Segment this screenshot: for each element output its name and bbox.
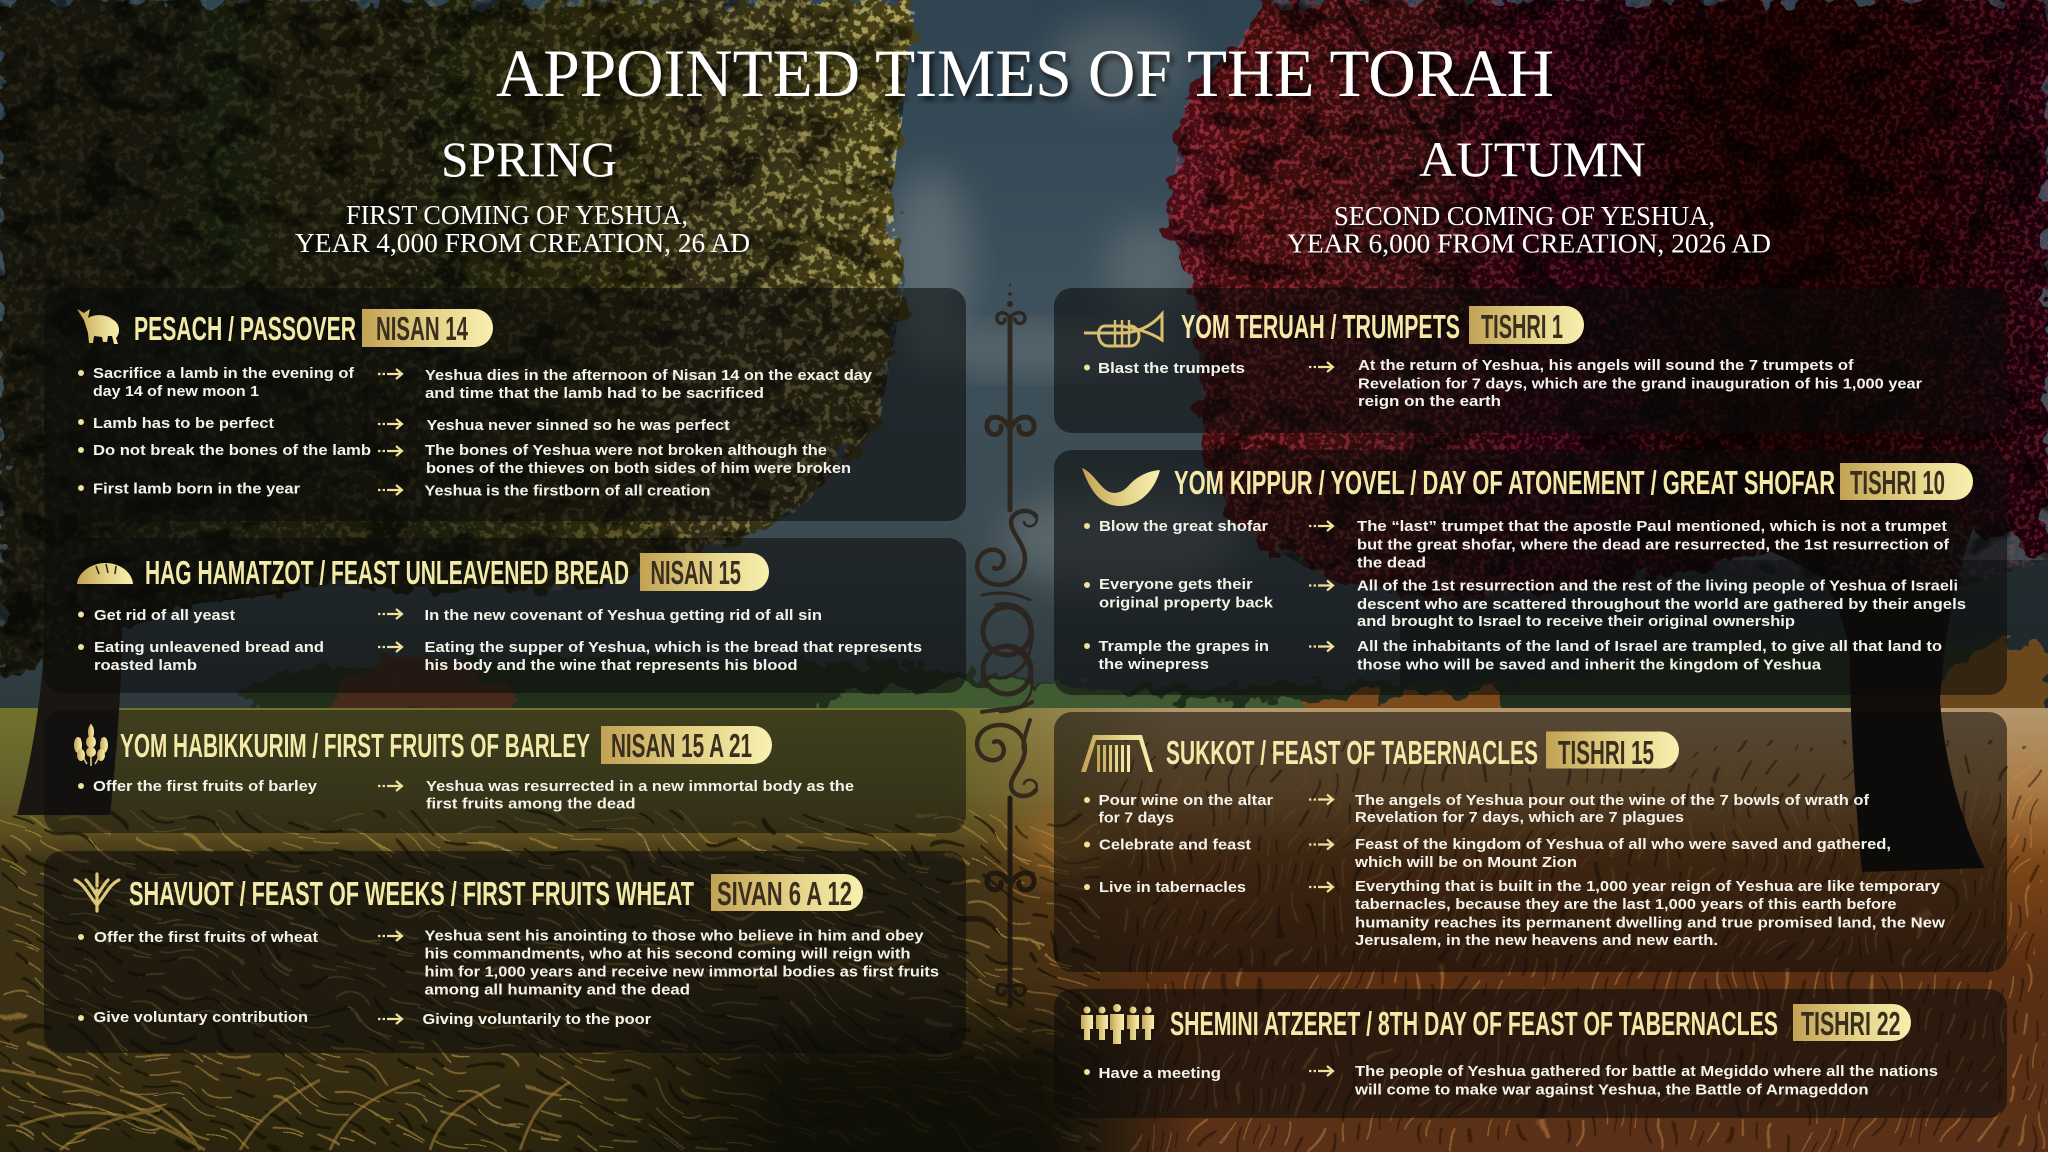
right tree canopy: [1168, 0, 2048, 600]
panel: Sukkot: [1054, 712, 2007, 972]
heading: autumn column: AUTUMN: [1419, 131, 1646, 187]
heading: autumn column: [1287, 131, 1771, 258]
row: sacrifice a lamb: day 14 of new moon 1: [93, 383, 259, 400]
row: sacrifice a lamb: and time that the lamb had to be sacrificed: [425, 385, 764, 402]
row: barley: Yeshua was resurrected in a new immortal body as the: [426, 778, 854, 795]
row: tabernacles: tabernacles, because they are the last 1,000 years of this earth before: [1355, 896, 1896, 913]
heading: Sukkot: SUKKOT / FEAST OF TABERNACLES: [1166, 734, 1538, 771]
row: trample grapes: Trample the grapes in: [1098, 638, 1269, 655]
row: yeast: In the new covenant of Yeshua getting rid of all sin: [424, 607, 822, 624]
row: meeting: will come to make war against Yeshua, the Battle of Armageddon: [1354, 1082, 1868, 1098]
heading: autumn column: SECOND COMING OF YESHUA,: [1334, 201, 1715, 231]
panel: Yom Teruah: [1054, 288, 2007, 433]
row: bones: Do not break the bones of the lamb: [93, 442, 371, 459]
icon: sheep: [77, 309, 119, 344]
date pill: Tishri 10: TISHRI 10: [1850, 464, 1945, 501]
row: unleavened bread: his body and the wine that represents his blood: [424, 657, 798, 674]
row: meeting: [1084, 1063, 1938, 1098]
row: unleavened bread: roasted lamb: [94, 657, 197, 674]
row: tabernacles: Jerusalem, in the new heavens and new earth.: [1355, 932, 1718, 949]
icon: bread: [77, 563, 133, 584]
row: first lamb: [78, 480, 710, 500]
row: great shofar: The “last” trumpet that the apostle Paul mentioned, which is not a trumpet: [1357, 518, 1947, 535]
row: tabernacles: Live in tabernacles: [1099, 879, 1246, 896]
row: great shofar: but the great shofar, where the dead are resurrected, the 1st resurrection of: [1357, 536, 1950, 554]
row: yeast: Get rid of all yeast: [94, 607, 235, 624]
row: trumpets: At the return of Yeshua, his angels will sound the 7 trumpets of: [1358, 357, 1855, 374]
row: unleavened bread: [78, 639, 922, 674]
row: trample grapes: those who will be saved and inherit the kingdom of Yeshua: [1357, 656, 1822, 674]
heading: spring column: YEAR 4,000 FROM CREATION, 26 AD: [295, 228, 750, 258]
row: great shofar: the dead: [1357, 554, 1426, 572]
date pill: Tishri 22: [1793, 1004, 1911, 1042]
date pill: Nisan 15: NISAN 15: [650, 554, 741, 591]
date pill: Nisan 14: NISAN 14: [376, 310, 468, 347]
panel: Yom HaBikkurim: [44, 710, 966, 833]
row: trumpets: [1084, 357, 1922, 410]
row: barley: [78, 778, 854, 812]
row: trample grapes: the winepress: [1098, 656, 1209, 673]
date pill: Tishri 22: TISHRI 22: [1801, 1005, 1900, 1042]
panel: Hag HaMatzot: [44, 538, 966, 693]
row: great shofar: Blow the great shofar: [1099, 518, 1268, 535]
row: lamb perfect: [78, 415, 730, 434]
distant treeline: [250, 640, 2048, 725]
row: tabernacles: Everything that is built in the 1,000 year reign of Yeshua are like temporary: [1355, 878, 1941, 895]
row: wheat: [78, 928, 939, 998]
fields: [0, 708, 2048, 1152]
icon: trumpet: [1084, 314, 1162, 346]
row: pour wine: Pour wine on the altar: [1098, 792, 1273, 809]
icon: people group: [1081, 1004, 1154, 1044]
row: trample grapes: All the inhabitants of the land of Israel are trampled, to give all that land to: [1357, 638, 1942, 655]
row: original property: Everyone gets their: [1099, 576, 1253, 593]
heading: Hag HaMatzot: HAG HAMATZOT / FEAST UNLEAVENED BREAD: [145, 554, 629, 591]
row: wheat: Offer the first fruits of wheat: [94, 929, 318, 946]
row: sacrifice a lamb: [78, 365, 873, 402]
row: pour wine: Revelation for 7 days, which are 7 plagues: [1355, 809, 1684, 826]
row: celebrate: Feast of the kingdom of Yeshua of all who were saved and gathered,: [1355, 836, 1891, 853]
row: voluntary contribution: Give voluntary contribution: [94, 1009, 308, 1026]
date pill: Nisan 15 a 21: NISAN 15 A 21: [611, 727, 752, 764]
central ornament divider: [977, 284, 1037, 1006]
row: trumpets: reign on the earth: [1358, 393, 1501, 410]
panel: Pesach / Passover: [44, 288, 966, 521]
row: original property: and brought to Israel to receive their original ownership: [1357, 613, 1795, 630]
heading: autumn column: YEAR 6,000 FROM CREATION, 2026 AD: [1287, 228, 1771, 258]
row: pour wine: for 7 days: [1098, 810, 1174, 826]
heading: Yom Teruah: YOM TERUAH / TRUMPETS: [1181, 308, 1460, 345]
left tree trunk and branches: [17, 580, 122, 815]
row: trumpets: Blast the trumpets: [1098, 360, 1245, 377]
date pill: Tishri 15: TISHRI 15: [1558, 734, 1654, 771]
date pill: Tishri 15: [1546, 732, 1679, 771]
row: original property: [1084, 576, 1966, 630]
panel: Shemini Atzeret: [1054, 989, 2007, 1118]
row: bones: The bones of Yeshua were not broken although the: [425, 442, 827, 459]
row: lamb perfect: Yeshua never sinned so he was perfect: [426, 417, 730, 434]
date pill: Sivan 6 a 12: [711, 874, 863, 912]
row: trumpets: Revelation for 7 days, which are the grand inauguration of his 1,000 year: [1358, 375, 1922, 392]
row: first lamb: Yeshua is the firstborn of all creation: [424, 482, 710, 500]
row: celebrate: [1084, 836, 1891, 871]
row: tabernacles: [1084, 878, 1945, 949]
heading: Pesach: PESACH / PASSOVER: [134, 310, 356, 347]
row: original property: original property back: [1099, 594, 1274, 612]
left tree canopy: [0, 0, 916, 680]
date pill: Tishri 1: [1469, 306, 1584, 345]
heading: Shavuot: SHAVUOT / FEAST OF WEEKS / FIRST FRUITS WHEAT: [129, 875, 694, 912]
row: barley: Offer the first fruits of barley: [93, 778, 318, 795]
heading: spring column: SPRING: [441, 131, 617, 187]
row: bones: [78, 442, 851, 477]
main title: APPOINTED TIMES OF THE TORAH: [496, 35, 1554, 111]
icon: shofar: [1082, 468, 1160, 506]
row: voluntary contribution: [78, 1009, 651, 1028]
row: wheat: among all humanity and the dead: [424, 982, 690, 998]
row: wheat: Yeshua sent his anointing to those who believe in him and obey: [424, 928, 924, 944]
date pill: Tishri 1: TISHRI 1: [1481, 308, 1563, 345]
heading: spring column: FIRST COMING OF YESHUA,: [346, 200, 688, 230]
row: wheat: him for 1,000 years and receive new immortal bodies as first fruits: [424, 964, 939, 980]
heading: spring column: [295, 131, 750, 258]
row: original property: All of the 1st resurrection and the rest of the living people of Yeshua of Israeli: [1357, 578, 1958, 594]
icon: tabernacle: [1081, 735, 1153, 772]
row: unleavened bread: Eating the supper of Yeshua, which is the bread that represents: [424, 639, 922, 656]
row: bones: bones of the thieves on both sides of him were broken: [426, 460, 851, 477]
heading: Yom HaBikkurim: YOM HABIKKURIM / FIRST FRUITS OF BARLEY: [120, 727, 590, 764]
icon: barley: [74, 724, 108, 766]
row: yeast: [78, 607, 822, 624]
date pill: Sivan 6 a 12: SIVAN 6 A 12: [717, 875, 852, 912]
row: celebrate: which will be on Mount Zion: [1354, 854, 1577, 871]
row: trample grapes: [1084, 638, 1942, 674]
row: pour wine: The angels of Yeshua pour out the wine of the 7 bowls of wrath of: [1355, 792, 1870, 809]
row: lamb perfect: Lamb has to be perfect: [93, 415, 274, 432]
row: voluntary contribution: Giving voluntarily to the poor: [422, 1011, 651, 1028]
row: celebrate: Celebrate and feast: [1099, 836, 1251, 854]
right tree trunk and branches: [1760, 510, 1985, 872]
date pill: Nisan 15 a 21: [601, 726, 772, 764]
panel: Yom Kippur: [1054, 450, 2007, 695]
row: pour wine: [1084, 792, 1870, 826]
panel: Shavuot: [44, 851, 966, 1053]
row: great shofar: [1084, 518, 1950, 572]
row: barley: first fruits among the dead: [426, 796, 636, 812]
row: meeting: Have a meeting: [1098, 1065, 1221, 1082]
row: wheat: his commandments, who at his second coming will reign with: [424, 946, 910, 962]
row: original property: descent who are scattered throughout the world are gathered by their angels: [1357, 596, 1966, 613]
row: sacrifice a lamb: Sacrifice a lamb in the evening of: [93, 365, 355, 382]
row: sacrifice a lamb: Yeshua dies in the afternoon of Nisan 14 on the exact day: [425, 367, 873, 384]
row: meeting: The people of Yeshua gathered for battle at Megiddo where all the nations: [1355, 1063, 1938, 1080]
row: tabernacles: humanity reaches its permanent dwelling and true promised land, the New: [1355, 914, 1945, 932]
icon: wheat sprout: [75, 874, 119, 911]
row: unleavened bread: Eating unleavened bread and: [94, 639, 324, 656]
row: first lamb: First lamb born in the year: [93, 480, 300, 498]
